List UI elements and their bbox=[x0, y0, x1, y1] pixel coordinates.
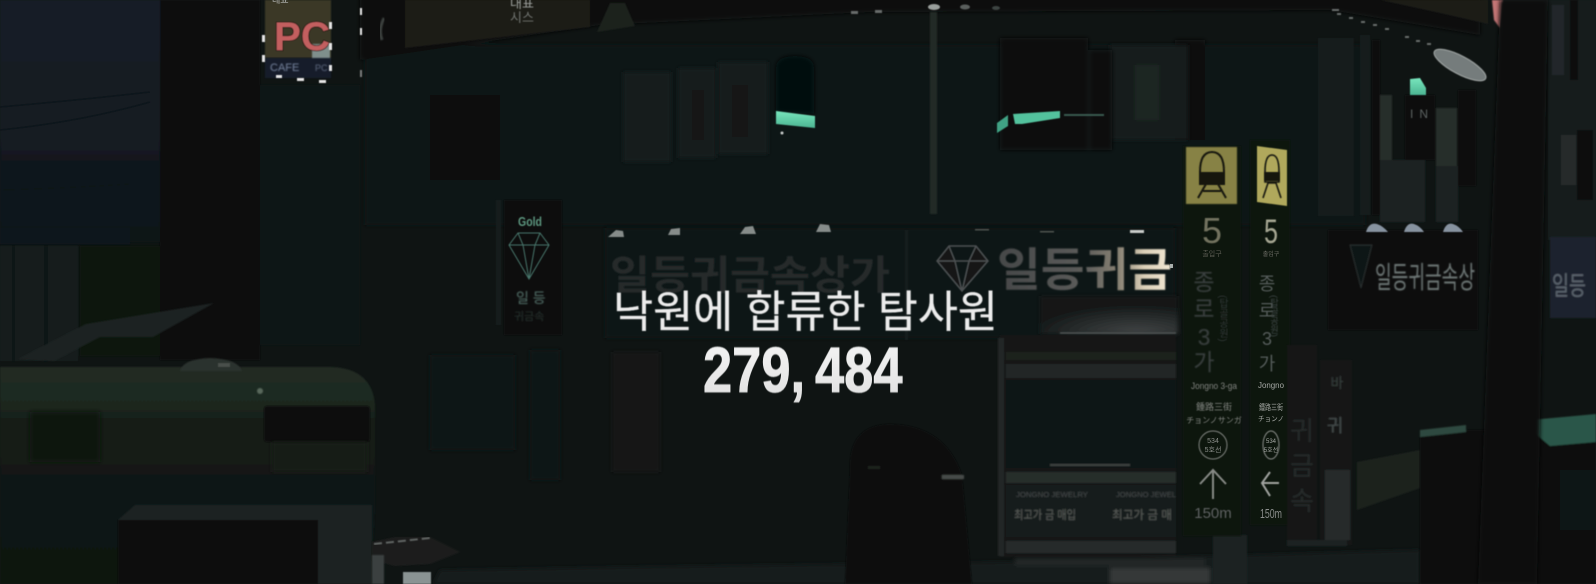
subway sign post left: 출입구 bbox=[1202, 249, 1222, 258]
subway sign post right: Jongno bbox=[1258, 381, 1285, 390]
lower storefronts: 최고가 금 매입 bbox=[1014, 508, 1076, 522]
pink sign fragment bbox=[1492, 0, 1503, 28]
green window lights bbox=[776, 78, 1426, 133]
shop sign band: 일등귀금 bbox=[997, 244, 1172, 296]
subway sign post left: 534 bbox=[1207, 438, 1219, 445]
subway sign post left: 종 bbox=[1193, 269, 1215, 295]
subway sign post left: Jongno 3-ga bbox=[1191, 381, 1237, 391]
sky and distant buildings bbox=[0, 0, 360, 361]
street lamp bbox=[1430, 43, 1490, 87]
wall PC letters bbox=[623, 45, 1188, 162]
dumpster bbox=[1420, 414, 1596, 584]
subway sign post right: 3 bbox=[1262, 329, 1272, 349]
upper facade bbox=[360, 0, 1480, 225]
lower storefronts: JONGNO JEWELRY bbox=[1016, 492, 1088, 499]
right gold shop sign bbox=[1328, 224, 1478, 330]
caption: headline: 낙원에 합류한 탐사원 bbox=[613, 288, 998, 337]
subway sign post left: 5호선 bbox=[1205, 445, 1221, 454]
lower right shop column bbox=[1287, 345, 1420, 546]
subway sign post left: (탑골공원) bbox=[1216, 295, 1228, 342]
PC cafe neon sign bbox=[262, 0, 362, 83]
subway sign post left: 5 bbox=[1202, 210, 1222, 251]
PC cafe neon sign: CAFE bbox=[270, 62, 299, 74]
subway sign post left: 3 bbox=[1198, 324, 1210, 350]
lower storefronts bbox=[430, 335, 1176, 557]
subway sign post left: 鍾路三街 bbox=[1196, 401, 1232, 412]
stair ramp bbox=[18, 303, 214, 361]
PC cafe neon sign: PC bbox=[315, 63, 328, 73]
top signs bbox=[380, 0, 1488, 48]
lower right shop column: 속 bbox=[1290, 486, 1314, 516]
top signs: 시스 bbox=[510, 10, 534, 25]
subway sign post right bbox=[1250, 140, 1290, 525]
shop sign band: 일등귀금속상가 bbox=[610, 254, 890, 298]
far right building bbox=[1548, 0, 1596, 240]
subway sign post right: 로 bbox=[1259, 301, 1275, 321]
lower storefronts: 최고가 금 매 bbox=[1112, 508, 1172, 522]
subway sign post right: 5호선 bbox=[1264, 446, 1278, 454]
dark windows bbox=[776, 38, 1112, 150]
gold vertical sign: 일 등 bbox=[516, 290, 546, 306]
gold vertical sign: 귀금속 bbox=[514, 310, 544, 323]
subway sign post right: 출입구 bbox=[1263, 250, 1280, 258]
subway sign post left: 로 bbox=[1193, 296, 1215, 322]
lower right shop column: 귀 bbox=[1290, 416, 1314, 446]
IN mark: IN bbox=[1410, 107, 1428, 121]
subway sign post left: チョンノサンガ bbox=[1186, 415, 1242, 425]
utility box bbox=[118, 505, 372, 584]
sign lamps row bbox=[608, 224, 1144, 237]
dark trash bin bbox=[845, 424, 972, 584]
subway sign post right: 5 bbox=[1264, 213, 1278, 251]
ground bbox=[433, 550, 1420, 584]
subway sign post left: 150m bbox=[1194, 505, 1232, 522]
facade pole and lamps bbox=[780, 4, 1000, 214]
caption: number: 279,484 bbox=[703, 335, 903, 406]
right blue sign bbox=[1550, 237, 1596, 318]
subway sign post right: 鍾路三街 bbox=[1259, 402, 1283, 412]
subway sign post right: 종 bbox=[1259, 274, 1275, 294]
subway sign post right: チョンノ bbox=[1258, 415, 1284, 423]
foreground utility pole bbox=[1478, 0, 1548, 584]
roof edge lights bbox=[851, 9, 1431, 45]
subway sign post right: (탑골공원) bbox=[1269, 295, 1279, 337]
gold vertical sign bbox=[496, 200, 562, 335]
lower right shop column: 바 bbox=[1331, 375, 1344, 391]
street debris bbox=[372, 537, 460, 584]
lower right shop column: 금 bbox=[1290, 451, 1314, 481]
PC cafe neon sign: PC bbox=[274, 15, 330, 59]
lower right shop column: 귀 bbox=[1327, 416, 1343, 436]
subway sign post right: 150m bbox=[1260, 506, 1282, 521]
gold vertical sign: Gold bbox=[518, 214, 542, 229]
shop sign band bbox=[605, 228, 1178, 340]
lower storefronts: JONGNO JEWEL bbox=[1116, 492, 1176, 499]
right gold shop sign: 일등귀금속상 bbox=[1375, 262, 1475, 295]
subway sign post left: 가 bbox=[1193, 349, 1215, 375]
subway sign post left bbox=[1183, 146, 1247, 584]
right tiled wall and windows bbox=[1318, 35, 1476, 222]
green bus bbox=[0, 358, 375, 584]
subway sign post right: 534 bbox=[1266, 439, 1277, 445]
subway sign post right: 가 bbox=[1259, 354, 1275, 374]
